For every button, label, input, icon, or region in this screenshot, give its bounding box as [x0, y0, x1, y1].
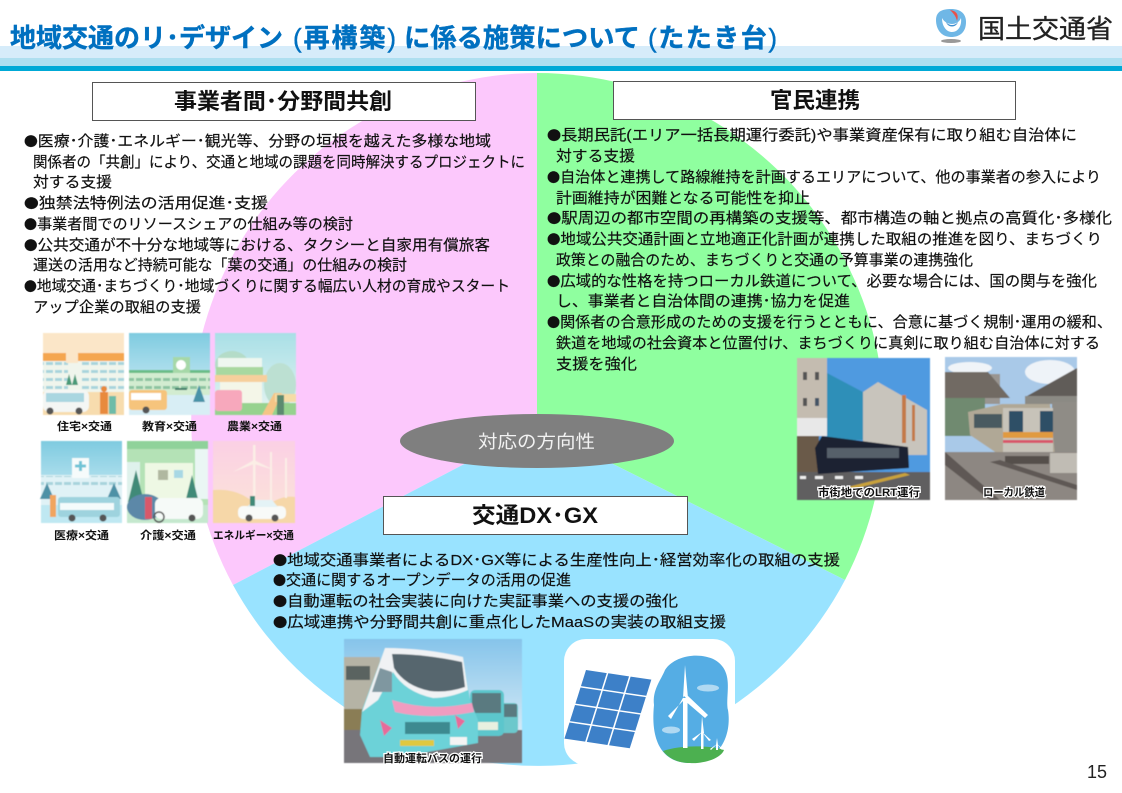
heading: public private partnership — [614, 82, 1016, 120]
text block: partnership bullets: ●自治体と連携して路線維持を計画するエリアについて、他の事業者の参入により — [547, 167, 1101, 186]
text block: collaboration bullets: ●事業者間でのリソースシェアの仕組み等の検討 — [24, 214, 353, 233]
heading: transport DX GX: 交通DX･GX — [472, 503, 598, 528]
text block: collaboration bullets: ●医療･介護･エネルギー･観光等、分野の垣根を越えた多様な地域 — [24, 131, 491, 150]
illustration: energy x transport — [213, 441, 295, 523]
text block: partnership bullets: ●地域公共交通計画と立地適正化計画が連携した取組の推進を図り、まちづくり — [547, 229, 1102, 248]
text block: collaboration bullets: アップ企業の取組の支援 — [33, 299, 201, 316]
pie segment: green — [537, 73, 884, 580]
text block: DX GX bullets — [273, 550, 840, 631]
header band — [0, 46, 1122, 71]
text block: collaboration bullets: 関係者の「共創」により、交通と地域の課題を同時解決するプロジェクトに — [33, 154, 525, 171]
panel: transport DX GX — [273, 496, 840, 765]
text block: DX GX bullets: ●自動運転の社会実装に向けた実証事業への支援の強化 — [273, 591, 678, 610]
title: 地域交通のリ･デザイン — [10, 23, 283, 53]
text block: partnership bullets: 計画維持が困難となる可能性を抑止 — [556, 190, 810, 207]
pie segment: pink — [191, 73, 537, 585]
text block: partnership bullets: 支援を強化 — [556, 356, 637, 373]
panel: public private partnership — [547, 82, 1112, 500]
panel: collaboration — [24, 82, 525, 542]
photo: local railway — [945, 357, 1077, 500]
text block: collaboration bullets — [24, 131, 525, 316]
photo: autonomous bus: 自動運転バスの運行 — [383, 751, 482, 765]
title: (たたき台) — [648, 23, 777, 53]
text block: DX GX bullets: ●地域交通事業者によるDX･GX等による生産性向上･経営効率化の取組の支援 — [273, 550, 840, 569]
title: に係る施策について — [404, 23, 640, 53]
text block: partnership bullets: 政策との融合のため、まちづくりと交通の予算事業の連携強化 — [556, 251, 973, 269]
photo: LRT in city — [797, 358, 930, 500]
caption: エネルギー×交通 — [213, 528, 294, 542]
illustration: education x transport — [129, 333, 210, 415]
text block: collaboration bullets: ●公共交通が不十分な地域等における、タクシーと自家用有償旅客 — [24, 235, 490, 254]
illustration: agriculture x transport — [215, 333, 296, 415]
icon: ministry logo — [936, 9, 966, 43]
caption: 医療×交通 — [54, 528, 109, 542]
heading: collaboration — [92, 82, 476, 120]
text block: partnership bullets: 対する支援 — [556, 148, 635, 165]
photo: local railway: ローカル鉄道 — [983, 485, 1045, 499]
illustration: solar panels and wind turbines — [564, 639, 735, 765]
heading: transport DX GX — [384, 496, 688, 534]
illustration: housing x transport — [43, 333, 124, 415]
text block: DX GX bullets: ●広域連携や分野間共創に重点化したMaaSの実装の取組支援 — [273, 612, 726, 631]
photo: autonomous bus — [344, 639, 522, 765]
text block: collaboration bullets: 運送の活用など持続可能な「葉の交通」の仕組みの検討 — [33, 257, 407, 274]
pie chart: three response directions — [191, 73, 884, 766]
caption: 介護×交通 — [140, 528, 196, 542]
photo: LRT in city: 市街地でのLRT運行 — [818, 485, 920, 499]
ministry name: 国土交通省 — [978, 14, 1113, 44]
text block: partnership bullets: し、事業者と自治体間の連携･協力を促進 — [556, 293, 850, 310]
text block: partnership bullets: ●広域的な性格を持つローカル鉄道について、必要な場合には、国の関与を強化 — [547, 271, 1097, 290]
text block: DX GX bullets: ●交通に関するオープンデータの活用の促進 — [273, 570, 571, 589]
text block: partnership bullets: ●駅周辺の都市空間の再構築の支援等、都市構造の軸と拠点の高質化･多様化 — [547, 208, 1112, 227]
caption: 住宅×交通 — [57, 419, 112, 433]
text block: collaboration bullets: ●独禁法特例法の活用促進･支援 — [24, 193, 268, 212]
heading: public private partnership: 官民連携 — [770, 88, 860, 113]
page number: 15 — [1087, 762, 1107, 782]
text block: collaboration bullets: ●地域交通･まちづくり･地域づくりに関する幅広い人材の育成やスタート — [24, 276, 510, 295]
center ellipse: direction of response — [400, 414, 674, 468]
heading: collaboration: 事業者間･分野間共創 — [174, 89, 392, 114]
text block: partnership bullets: 鉄道を地域の社会資本と位置付け、まちづくりに真剣に取り組む自治体に対する — [556, 334, 1100, 352]
caption: 教育×交通 — [142, 419, 197, 433]
pie segment: blue — [233, 426, 845, 766]
title — [10, 23, 777, 53]
text block: partnership bullets: ●関係者の合意形成のための支援を行うとともに、合意に基づく規制･運用の緩和、 — [547, 312, 1112, 331]
title: (再構築) — [293, 23, 396, 53]
illustration: care x transport — [127, 441, 208, 523]
illustration: medical x transport — [40, 441, 122, 523]
caption: 農業×交通 — [227, 419, 282, 433]
text block: partnership bullets: ●長期民託(エリア一括長期運行委託)や事業資産保有に取り組む自治体に — [547, 125, 1077, 144]
text block: partnership bullets — [547, 125, 1112, 373]
text block: collaboration bullets: 対する支援 — [33, 174, 112, 191]
center ellipse: direction of response: 対応の方向性 — [478, 432, 595, 452]
